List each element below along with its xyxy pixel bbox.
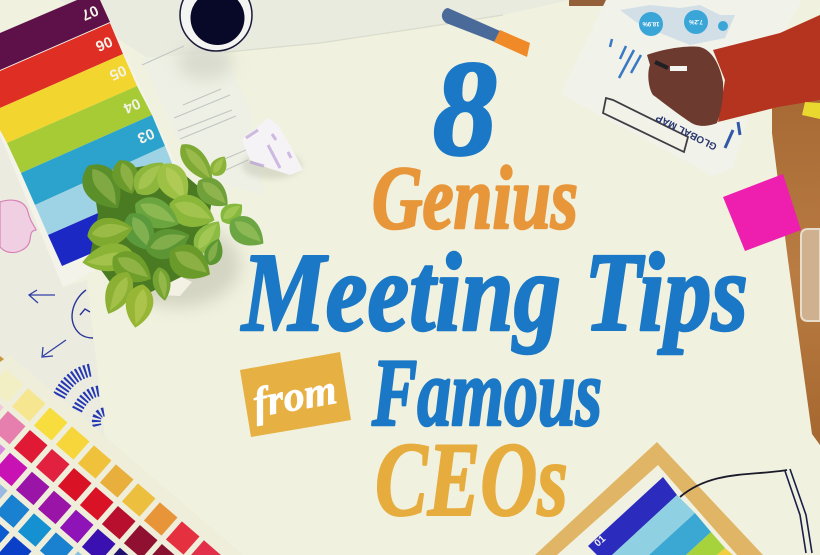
panel: sketch paper	[0, 135, 105, 437]
icon: yellow sticky note	[802, 102, 820, 119]
stripe numbers: 06	[93, 32, 115, 55]
panel: folder with color card	[535, 442, 763, 555]
circle stat two: 7.2%	[689, 18, 703, 24]
stripe green	[686, 532, 725, 555]
stripe 07	[0, 0, 110, 70]
icon: coffee cup	[177, 0, 252, 80]
document small text lines	[142, 46, 248, 170]
stripe light blue	[612, 495, 695, 555]
sketch: head outline	[72, 290, 93, 338]
title: CEOs: CEOs	[375, 421, 568, 538]
panel: white document	[142, 46, 264, 195]
phone at right edge	[801, 229, 820, 321]
from text: from	[249, 367, 340, 427]
title number: 8: 8	[433, 34, 497, 184]
icon: glasses	[680, 469, 812, 553]
sketch: second arrow	[42, 340, 66, 357]
panel: colored brochure	[0, 0, 200, 287]
swatch grid	[0, 369, 199, 555]
stripe yellow	[717, 548, 733, 555]
plant pot	[150, 272, 192, 296]
pen clip	[670, 66, 687, 71]
sketch: arrow	[29, 290, 55, 303]
wood desk, left sliver	[0, 293, 25, 365]
stripe 02	[35, 146, 178, 235]
stripe blue	[649, 513, 711, 555]
circle stat one: 18.9%	[642, 20, 660, 26]
icon: marker	[442, 8, 530, 57]
label: global map: GLOBAL MAP	[654, 111, 719, 152]
stripe numbers	[79, 1, 157, 147]
stripe 05	[0, 54, 137, 143]
stripe dark blue	[588, 477, 677, 555]
bar chart	[610, 39, 641, 78]
stripe 04	[7, 86, 152, 173]
plant dark center	[90, 165, 212, 300]
sketch: pink heart	[0, 200, 36, 252]
circle stat two	[684, 10, 708, 34]
swatch tiles cut by the bottom edge	[0, 525, 221, 555]
stripe 01	[48, 178, 192, 266]
icon: pink sticky note	[723, 174, 801, 251]
upper paper sheet	[60, 0, 570, 60]
clip holder	[603, 98, 688, 152]
circle stat three	[718, 21, 728, 31]
pen	[655, 62, 668, 68]
stripe numbers: 04	[120, 94, 143, 117]
sweater sleeve	[713, 15, 820, 122]
stripe numbers: 03	[135, 124, 157, 147]
circle stat one	[639, 12, 663, 36]
main paper edge shadow	[217, 15, 503, 53]
panel: plant	[74, 138, 271, 330]
title: Famous: Famous	[371, 339, 602, 446]
stripe numbers: 07	[79, 1, 101, 24]
stripe numbers: 05	[107, 61, 129, 84]
title: Genius: Genius	[372, 149, 578, 248]
icon: crumpled paper	[242, 118, 303, 179]
panel: clipboard with chart	[562, 0, 802, 176]
label 01: 01	[593, 533, 608, 549]
stripe 06	[0, 23, 123, 108]
from badge	[240, 352, 351, 437]
wood desk, top sliver	[569, 0, 607, 6]
plant leaves	[74, 138, 271, 330]
folder inner	[557, 465, 737, 555]
stripe 03	[21, 115, 165, 205]
sketch: blue fans	[59, 370, 104, 426]
logo mark	[725, 122, 740, 148]
folder frame	[535, 442, 763, 555]
brochure white card	[0, 0, 200, 287]
plant shadow	[116, 223, 240, 307]
icon: hand with pen and red sweater	[647, 15, 820, 126]
map shape	[620, 5, 735, 45]
panel: color swatch card	[0, 355, 243, 555]
wood desk, right side	[772, 100, 820, 445]
hand	[647, 47, 723, 126]
